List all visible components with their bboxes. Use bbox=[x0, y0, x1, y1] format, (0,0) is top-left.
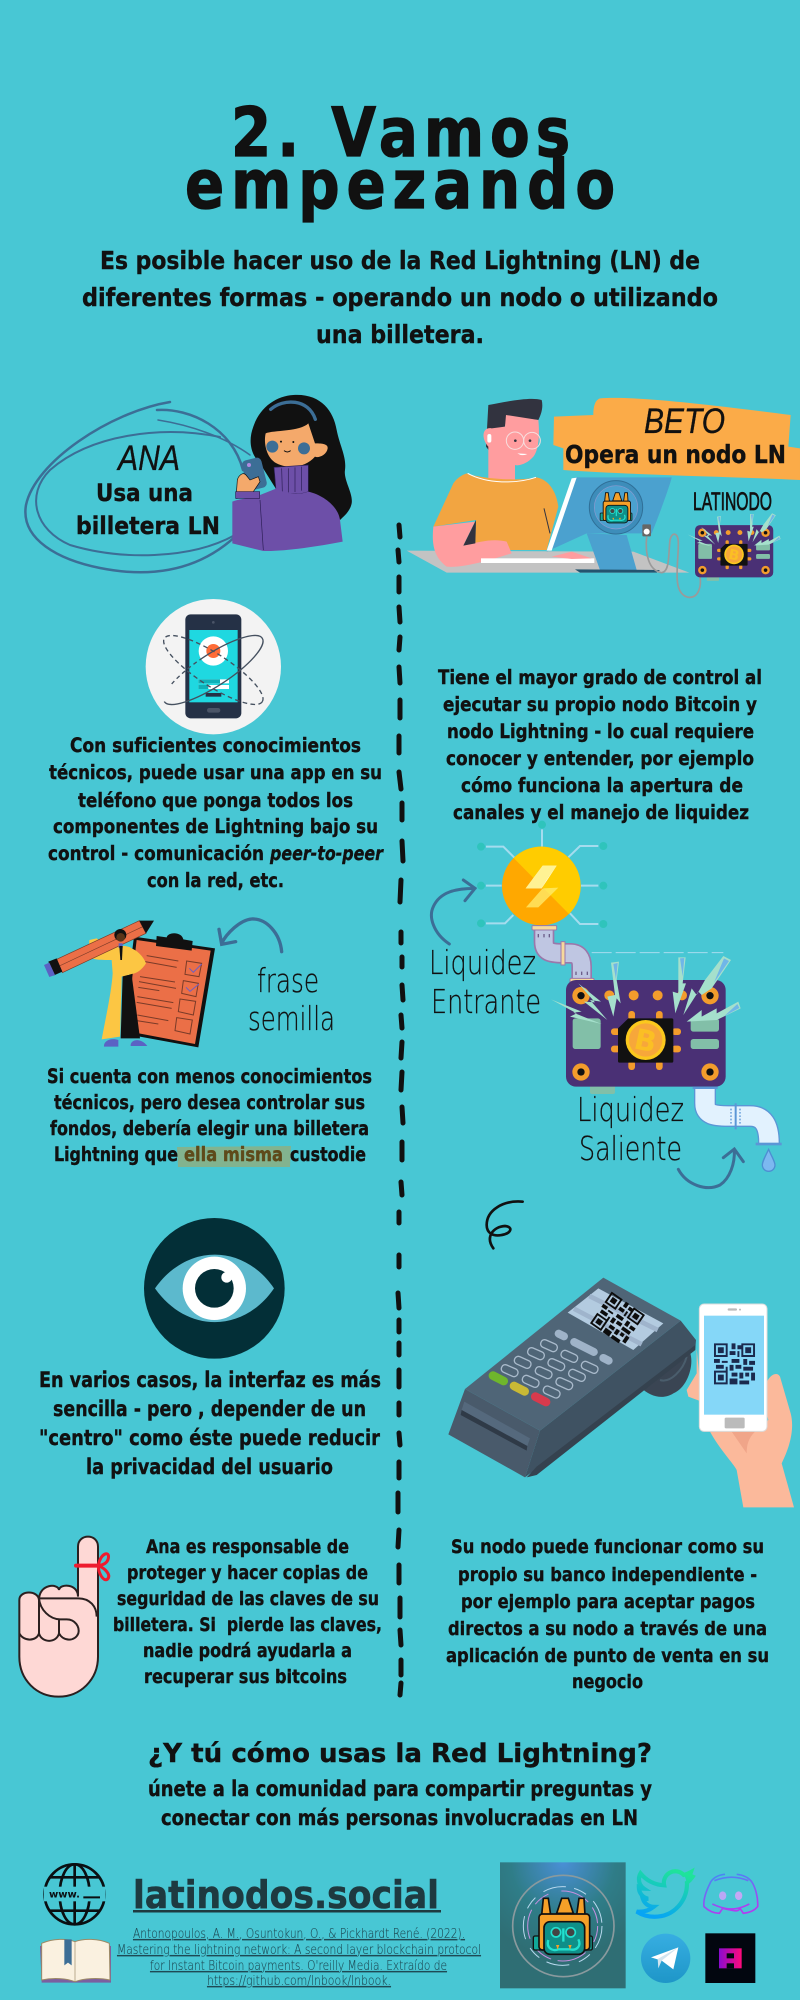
label: incoming liquidity bbox=[429, 943, 541, 1021]
panel: payment terminal and phone bbox=[448, 1201, 794, 1507]
text: node as a bank: negocio bbox=[572, 1671, 643, 1693]
center dashed divider bbox=[398, 525, 403, 1695]
icon: Telegram bbox=[641, 1934, 690, 1983]
panel: phone app icon bbox=[146, 599, 281, 734]
text: self custody wallet: técnicos, pero desea controlar sus bbox=[54, 1091, 365, 1114]
text: advanced wallet users: control - comunicación bbox=[48, 842, 264, 865]
label: incoming liquidity: Entrante bbox=[431, 982, 541, 1021]
title: empezando bbox=[185, 144, 615, 224]
panel: finger with ribbon icon bbox=[19, 1537, 109, 1697]
text: running own node: nodo Lightning - lo cual requiere bbox=[447, 720, 754, 743]
closing call to action: únete a la comunidad para compartir preguntas y bbox=[148, 1777, 652, 1801]
text: custodial privacy: sencilla - pero , depender de un bbox=[53, 1397, 366, 1421]
text: self custody wallet: Lightning que bbox=[54, 1143, 178, 1166]
panel: liquidity diagram bbox=[429, 821, 782, 1188]
text: advanced wallet users: con la red, etc. bbox=[147, 869, 284, 892]
text: node as a bank: por ejemplo para aceptar pagos bbox=[461, 1591, 755, 1613]
website link: latinodos.social bbox=[133, 1873, 439, 1917]
clipboard bbox=[122, 933, 215, 1047]
text: running own node: ejecutar su propio nodo Bitcoin y bbox=[443, 693, 757, 716]
role: wallet user: Usa una bbox=[96, 479, 193, 507]
node board bbox=[551, 956, 741, 1094]
text: node as a bank bbox=[446, 1536, 769, 1693]
text: custodial privacy: "centro" como éste puede reducir bbox=[39, 1426, 381, 1450]
text: running own node: canales y el manejo de liquidez bbox=[453, 801, 749, 824]
text: advanced wallet users: teléfono que ponga todos los bbox=[78, 789, 353, 812]
lightning bulb and pipes bbox=[477, 821, 723, 983]
text: key responsibility: billetera. Si pierde las claves, bbox=[113, 1614, 382, 1636]
text: advanced wallet users: técnicos, puede usar una app en su bbox=[49, 761, 382, 784]
panel: Ana header bbox=[25, 395, 352, 572]
intro paragraph: una billetera. bbox=[316, 320, 484, 349]
orange banner bbox=[553, 398, 800, 480]
person with pencil bbox=[44, 921, 154, 1047]
text: custodial privacy: la privacidad del usuario bbox=[86, 1455, 333, 1479]
panel: social logos bbox=[500, 1862, 758, 1988]
illustration: Ana with phone bbox=[232, 395, 352, 551]
text: advanced wallet users bbox=[48, 734, 384, 892]
highlight bbox=[177, 1146, 291, 1167]
text: node as a bank: propio su banco independiente - bbox=[458, 1564, 757, 1586]
name: ANA: ANA bbox=[116, 439, 180, 478]
text: self custody wallet: custodie bbox=[290, 1143, 366, 1166]
text: key responsibility: proteger y hacer copias de bbox=[127, 1562, 368, 1584]
text: self custody wallet: fondos, debería elegir una billetera bbox=[50, 1117, 369, 1140]
text: advanced wallet users: Con suficientes conocimientos bbox=[70, 734, 361, 757]
role: wallet user: billetera LN bbox=[76, 512, 220, 540]
intro paragraph: Es posible hacer uso de la Red Lightning (LN) de bbox=[100, 246, 700, 275]
decorative curl bbox=[487, 1201, 523, 1248]
panel: eye icon bbox=[144, 1218, 285, 1359]
text: advanced wallet users: componentes de Lightning bajo su bbox=[53, 815, 378, 838]
citation: Mastering the lightning network: A second layer blockchain protocol bbox=[117, 1942, 481, 1958]
text: key responsibility: seguridad de las claves de su bbox=[117, 1588, 379, 1610]
intro paragraph bbox=[82, 246, 718, 349]
label: outgoing liquidity bbox=[577, 1090, 684, 1168]
label: frase semilla: frase bbox=[257, 961, 319, 1000]
text: custodial privacy bbox=[39, 1368, 381, 1479]
icon: A app bbox=[705, 1933, 755, 1983]
panel: Beto header bbox=[407, 398, 800, 597]
icon: open book bbox=[40, 1939, 111, 1983]
text: key responsibility: recuperar sus bitcoins bbox=[144, 1666, 347, 1688]
text: running own node: cómo funciona la apertura de bbox=[461, 774, 743, 797]
hand holding phone bbox=[687, 1304, 794, 1507]
closing heading: ¿Y tú cómo usas la Red Lightning? bbox=[148, 1739, 652, 1769]
closing call to action: conectar con más personas involucradas en LN bbox=[161, 1806, 638, 1830]
label: outgoing liquidity: Liquidez bbox=[577, 1090, 684, 1129]
intro paragraph: diferentes formas - operando un nodo o utilizando bbox=[82, 283, 718, 312]
citation bbox=[117, 1926, 481, 1989]
icon: node board bbox=[688, 513, 781, 581]
text: custodial privacy: En varios casos, la interfaz es más bbox=[39, 1368, 381, 1392]
icon: Discord bbox=[704, 1874, 758, 1913]
label: outgoing liquidity: Saliente bbox=[579, 1129, 682, 1168]
icon: Twitter bbox=[637, 1871, 693, 1917]
citation: https://github.com/lnbook/lnbook. bbox=[207, 1973, 391, 1989]
panel: seed phrase illustration bbox=[44, 919, 282, 1047]
illustration: Beto at computer bbox=[407, 399, 700, 597]
text: key responsibility bbox=[113, 1536, 382, 1688]
citation: for Instant Bitcoin payments. O'reilly Media. Extraído de bbox=[150, 1958, 447, 1974]
text: advanced wallet users: peer-to-peer bbox=[269, 842, 384, 865]
title: 2. Vamos bbox=[231, 92, 570, 172]
title bbox=[185, 92, 615, 224]
text: self custody wallet: ella misma bbox=[184, 1143, 283, 1166]
icon: globe www: www. bbox=[49, 1889, 80, 1900]
scribble circle bbox=[25, 402, 250, 572]
arrow to seed phrase bbox=[219, 919, 282, 952]
citation: Antonopoulos, A. M., Osuntokun, O., & Pickhardt René. (2022). bbox=[133, 1926, 465, 1942]
point of sale terminal bbox=[448, 1278, 696, 1477]
label: incoming liquidity: Liquidez bbox=[429, 943, 536, 982]
text: self custody wallet: Si cuenta con menos conocimientos bbox=[47, 1065, 372, 1088]
closing call to action bbox=[148, 1777, 652, 1830]
name: BETO: BETO bbox=[644, 402, 725, 441]
role: wallet user bbox=[76, 479, 220, 540]
outgoing pipe and arrows bbox=[431, 880, 782, 1188]
text: key responsibility: nadie podrá ayudarla a bbox=[143, 1640, 352, 1662]
logo: Latinodos bbox=[500, 1862, 626, 1988]
label: frase semilla: semilla bbox=[248, 999, 335, 1038]
text: self custody wallet bbox=[47, 1065, 372, 1167]
label: frase semilla bbox=[248, 961, 335, 1038]
icon: globe www bbox=[44, 1864, 106, 1924]
text: running own node bbox=[438, 666, 762, 824]
text: running own node: conocer y entender, por ejemplo bbox=[446, 747, 754, 770]
text: key responsibility: Ana es responsable de bbox=[146, 1536, 349, 1558]
